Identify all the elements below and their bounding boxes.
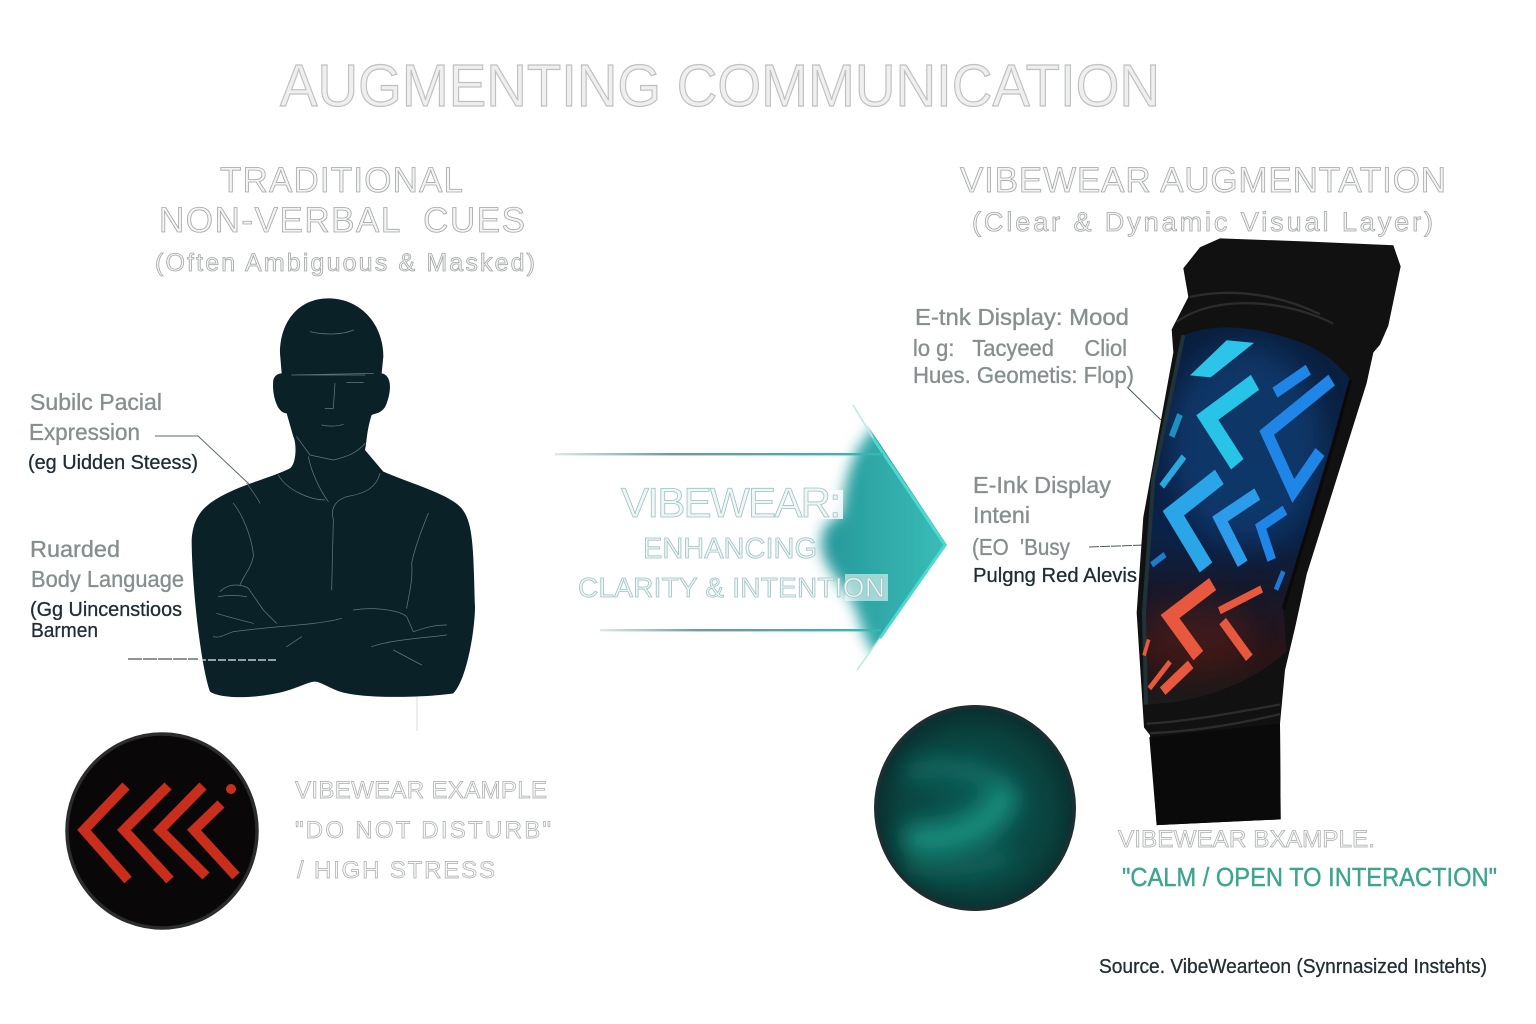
text: calm example [1118,826,1497,892]
label: guarded body language: Ruarded [30,536,120,562]
label: subtle facial expression [28,389,198,474]
label: guarded body language: Barmen [31,620,98,642]
arrow text: VIBEWEAR: [621,479,841,526]
illustration: vibewear sleeve [1137,238,1401,825]
text: do not disturb example: "DO NOT DISTURB" [295,817,551,844]
title: AUGMENTING COMMUNICATION [280,53,1160,119]
label: guarded body language [30,536,184,642]
leader line: facial expression [155,436,249,484]
text: calm example: VIBEWEAR BXAMPLE. [1118,826,1375,853]
cyan and blue chevrons [1152,340,1332,590]
label: e-ink display mood log: E-tnk Display: Mood [915,304,1129,330]
label: e-ink display intent [972,472,1137,587]
label: e-ink display mood log [913,304,1134,388]
heading: traditional non-verbal cues: (Often Ambiguous & Masked) [155,249,535,277]
leader line: mood log [1128,388,1161,420]
text: do not disturb example: VIBEWEAR EXAMPLE [295,777,547,804]
leader line: body language [128,659,277,660]
label: subtle facial expression: Subilc Pacial [30,389,162,415]
text: calm example: "CALM / OPEN TO INTERACTION" [1122,862,1497,892]
source note: Source. VibeWearteon (Synrnasized Instehts) [1099,956,1487,978]
red chevrons [1144,584,1262,691]
label: subtle facial expression: Expression [29,419,140,445]
label: e-ink display intent: Inteni [973,502,1030,528]
arrow text: CLARITY & INTENTION [578,572,885,603]
heading: traditional non-verbal cues: TRADITIONAL [220,161,463,200]
badge: teal calm texture [876,707,1074,909]
arrow: vibewear enhancing clarity [555,404,947,670]
arrow text: ENHANCING [643,533,817,565]
heading: vibewear augmentation: (Clear & Dynamic Visual Layer) [972,207,1433,237]
badge: red chevrons do not disturb [67,734,257,928]
label: guarded body language: Body Language [31,566,184,592]
label: e-ink display mood log: lo g: Tacyeed Cliol [913,335,1127,361]
heading: traditional non-verbal cues [155,161,535,277]
label: e-ink display intent: E-Ink Display [973,472,1112,498]
label: e-ink display mood log: Hues. Geometis: Flop) [913,362,1134,388]
label: e-ink display intent: (EO 'Busy [972,534,1070,560]
label: subtle facial expression: (eg Uidden Steess) [28,452,198,474]
heading: vibewear augmentation [960,161,1446,237]
leader line: intent [1089,545,1145,547]
heading: traditional non-verbal cues: NON-VERBAL CUES [159,201,525,240]
arrow text [578,479,885,603]
heading: vibewear augmentation: VIBEWEAR AUGMENTATION [960,161,1446,200]
text: do not disturb example [295,777,551,884]
text: do not disturb example: / HIGH STRESS [297,857,495,884]
icon: person silhouette with crossed arms [192,298,475,697]
label: e-ink display intent: Pulgng Red Alevis [973,565,1137,587]
faint mark below silhouette [416,697,418,731]
label: guarded body language: (Gg Uincenstioos [30,599,182,621]
